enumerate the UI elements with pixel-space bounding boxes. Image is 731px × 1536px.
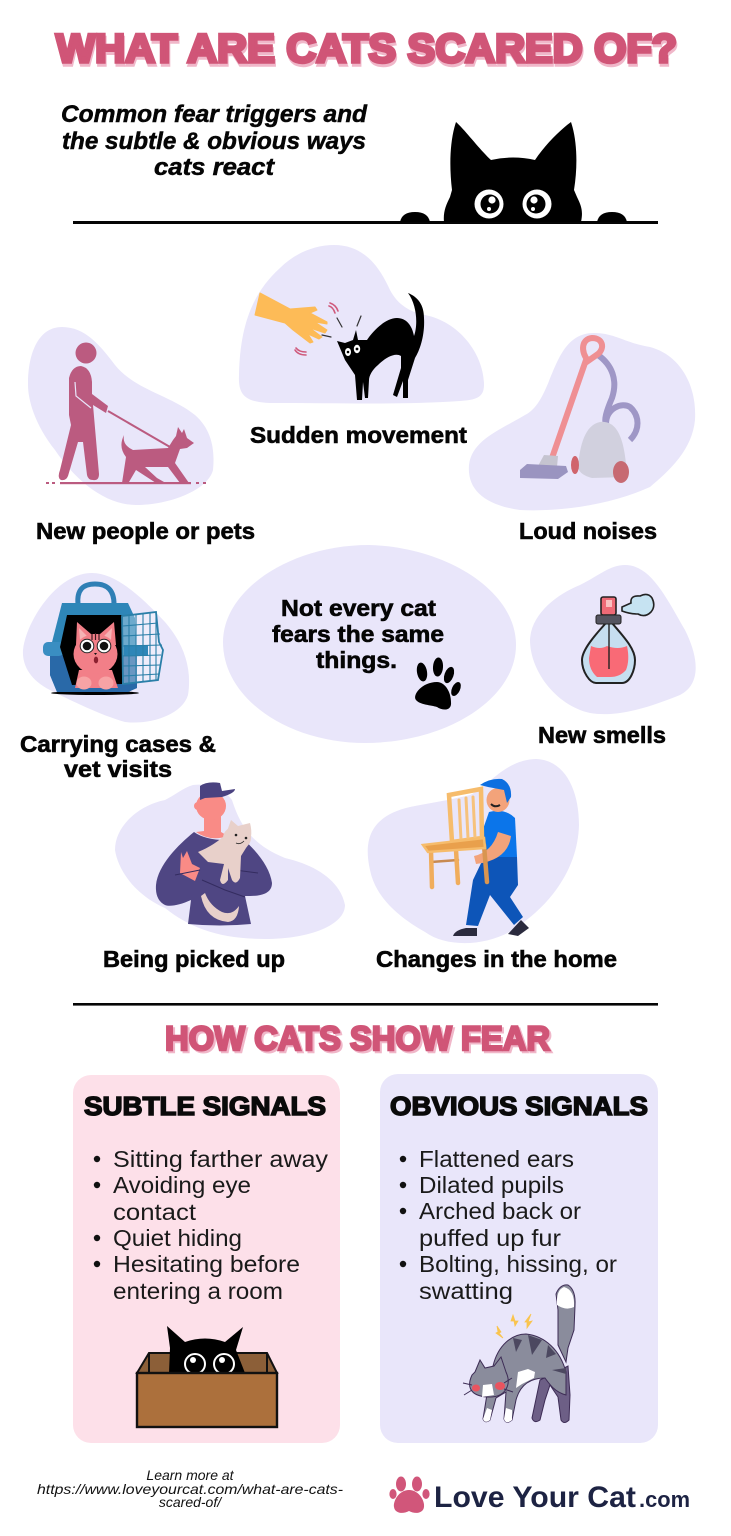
icon: paw print (415, 657, 463, 710)
icon: vacuum cleaner (520, 338, 638, 483)
top divider (73, 221, 658, 224)
middle divider (73, 1003, 658, 1006)
subtitle: cats react (154, 154, 275, 181)
footer: learn more link: Learn more at (146, 1467, 235, 1483)
panel background (380, 1074, 658, 1443)
label (20, 731, 216, 782)
heading: how cats show fear: HOW CATS SHOW FEAR (165, 1020, 550, 1058)
panel: obvious signals (380, 1074, 658, 1443)
list: Arched back or (419, 1198, 581, 1224)
list: entering a room (113, 1278, 283, 1304)
list: Bolting, hissing, or (419, 1251, 617, 1277)
blob (530, 565, 696, 714)
callout text: things. (316, 647, 397, 673)
list: swatting (419, 1278, 513, 1304)
label: Changes in the home (376, 946, 617, 972)
callout text (272, 595, 444, 673)
icon: perfume bottle (582, 594, 654, 683)
list: Dilated pupils (419, 1172, 564, 1198)
footer: learn more link (37, 1467, 343, 1510)
blob (223, 545, 516, 743)
subtitle (61, 101, 368, 181)
list: contact (113, 1199, 197, 1225)
icon: cat in box (137, 1326, 277, 1427)
blob (469, 333, 695, 510)
logo wordmark: .com (639, 1487, 690, 1512)
icon: arched black cat (337, 293, 424, 400)
blob (239, 245, 484, 404)
blob (368, 759, 579, 943)
heading: how cats show fear: HOW CATS SHOW FEAR (167, 1022, 552, 1060)
panel: sudden movement (239, 245, 484, 448)
icon: peeking black cat (400, 122, 627, 222)
panel: new people or pets (28, 327, 255, 544)
list: Avoiding eye (113, 1172, 251, 1198)
callout text: fears the same (272, 621, 444, 647)
label: Carrying cases & (20, 731, 216, 757)
list: Sitting farther away (113, 1146, 329, 1172)
label: vet visits (64, 756, 172, 782)
logo: love your cat (389, 1476, 690, 1514)
heading: OBVIOUS SIGNALS (390, 1091, 648, 1121)
icon: person and dog (46, 342, 206, 484)
title: WHAT ARE CATS SCARED OF? (56, 27, 677, 71)
label: New smells (538, 722, 666, 748)
panel: being picked up (103, 782, 345, 972)
title: WHAT ARE CATS SCARED OF? (57, 30, 678, 74)
list (400, 1146, 617, 1304)
subtitle: the subtle & obvious ways (62, 128, 366, 155)
label: Sudden movement (250, 422, 467, 448)
icon: man holding cat (156, 782, 272, 926)
list: Hesitating before (113, 1251, 300, 1277)
list (94, 1146, 329, 1304)
callout text: Not every cat (281, 595, 436, 621)
icon: scared pink cat (74, 622, 118, 690)
footer: learn more link: https://www.loveyourcat.com/what-are-cats- (37, 1481, 343, 1497)
panel: subtle signals (73, 1075, 340, 1443)
label: Loud noises (519, 518, 657, 544)
icon: man carrying chair (423, 779, 529, 936)
blob (28, 327, 214, 505)
panel: callout, not every cat (223, 545, 516, 743)
icon: carrier grille door (122, 612, 163, 684)
subtitle: Common fear triggers and (61, 101, 368, 128)
panel: new smells (530, 565, 696, 748)
label: New people or pets (36, 518, 255, 544)
footer: learn more link: scared-of/ (159, 1494, 223, 1510)
label: Being picked up (103, 946, 285, 972)
blob (115, 785, 345, 939)
icon: hand (255, 293, 327, 343)
list: Quiet hiding (113, 1225, 242, 1251)
icon: scared striped cat (463, 1285, 575, 1422)
panel background (73, 1075, 340, 1443)
icon: pet carrier (43, 584, 163, 695)
list: Flattened ears (419, 1146, 574, 1172)
panel: carrying cases (20, 573, 216, 782)
list: puffed up fur (419, 1225, 561, 1251)
heading: SUBTLE SIGNALS (84, 1091, 326, 1121)
icon: motion marks (295, 303, 361, 355)
logo wordmark: Love Your Cat (434, 1481, 636, 1514)
panel: changes in the home (368, 759, 617, 972)
blob (23, 573, 189, 723)
icon: logo paw (389, 1476, 430, 1513)
panel: loud noises (469, 333, 695, 544)
